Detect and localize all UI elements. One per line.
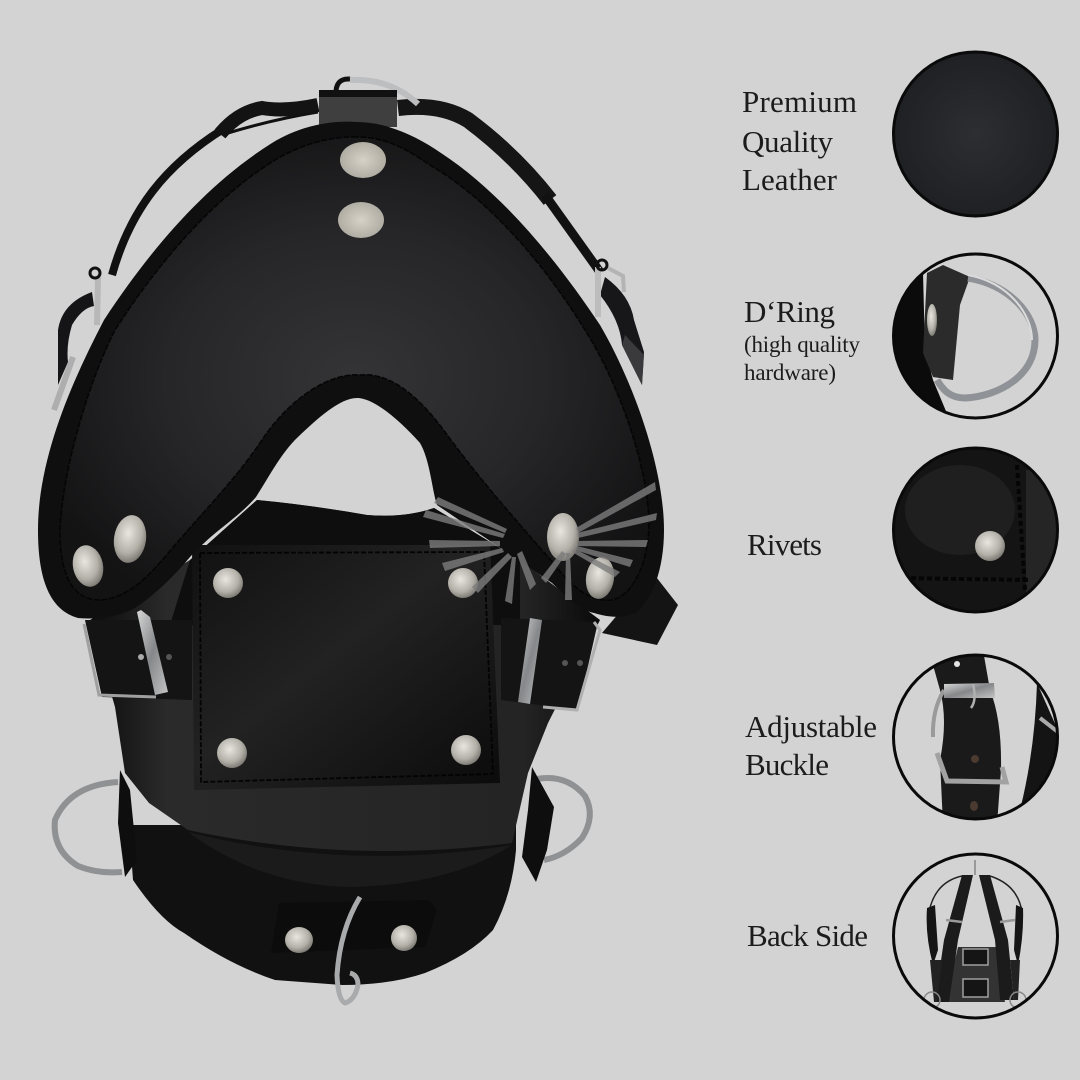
feature: adjustable buckle	[745, 650, 1060, 825]
rear tab	[602, 573, 678, 645]
label: Leather	[742, 162, 838, 197]
detail circle: back view of harness	[890, 850, 1060, 1020]
detail circle: rivet close-up	[890, 445, 1060, 615]
shaded upper body	[170, 500, 520, 625]
detail circle: leather texture	[894, 52, 1058, 216]
mouth flap	[192, 545, 500, 790]
blindfold panel	[38, 122, 664, 619]
side D-rings	[55, 778, 590, 872]
collar D-ring	[337, 897, 360, 1003]
detail circle: buckle close-up	[890, 650, 1060, 825]
label	[742, 84, 857, 197]
collar tab and rivets	[271, 900, 437, 953]
product: leather hood	[38, 79, 678, 1003]
label: (high quality	[744, 332, 860, 357]
feature: premium quality leather	[742, 52, 1058, 216]
label: Buckle	[745, 747, 829, 782]
label: Back Side	[747, 918, 868, 953]
chin roll	[188, 832, 512, 887]
label	[745, 709, 877, 782]
feature: back side	[747, 850, 1060, 1020]
label: Premium	[742, 84, 857, 119]
label: Rivets	[747, 527, 822, 562]
label: Adjustable	[745, 709, 877, 744]
collar	[129, 825, 516, 985]
feature: rivets	[747, 445, 1060, 615]
label: hardware)	[744, 360, 836, 385]
right buckle strap	[501, 618, 600, 710]
left side loop	[58, 292, 94, 385]
label	[744, 294, 860, 385]
hood body	[90, 500, 600, 851]
label: D‘Ring	[744, 294, 835, 329]
left buckle strap	[84, 610, 192, 700]
right side loop	[600, 277, 644, 385]
label: Quality	[742, 124, 834, 159]
feature: D-ring	[744, 250, 1060, 420]
detail circle: D-ring close-up	[890, 250, 1060, 420]
top harness straps and ring	[54, 79, 644, 410]
ring tabs	[118, 770, 137, 877]
logo: grey wings watermark	[423, 482, 657, 604]
